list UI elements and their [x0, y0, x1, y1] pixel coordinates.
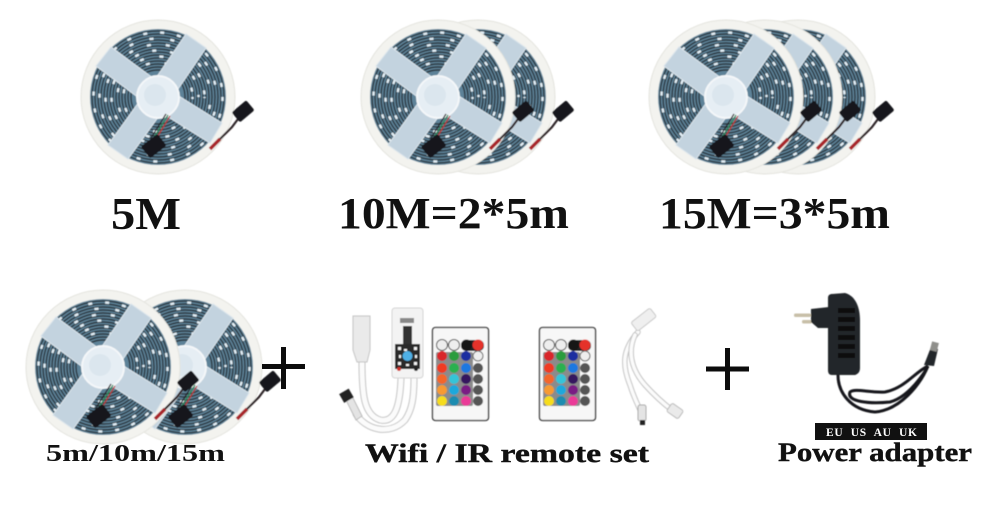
plug region banner [815, 423, 927, 440]
plus sign 2 [706, 348, 749, 390]
RGB splitter cable [625, 308, 684, 425]
reels: 15M [649, 20, 895, 174]
label: Power adapter: Power adapter [778, 438, 972, 467]
reels: 10M [361, 20, 575, 174]
label: 10M=2*5m: 10M=2*5m [338, 189, 569, 238]
plug region banner: EU US AU UK [826, 427, 917, 439]
IR remote 2 [540, 328, 596, 420]
reels: bottom kit [26, 290, 282, 444]
label: 5M: 5M [111, 188, 181, 239]
label: 5m/10m/15m: 5m/10m/15m [46, 441, 225, 467]
reel: 5M [81, 20, 255, 174]
label: Wifi / IR remote set: Wifi / IR remote set [365, 439, 649, 468]
power adapter [794, 293, 939, 412]
wifi controller [339, 308, 423, 429]
label: 15M=3*5m: 15M=3*5m [659, 189, 890, 238]
IR remote 1 [432, 328, 488, 420]
plus sign 1 [262, 347, 305, 389]
